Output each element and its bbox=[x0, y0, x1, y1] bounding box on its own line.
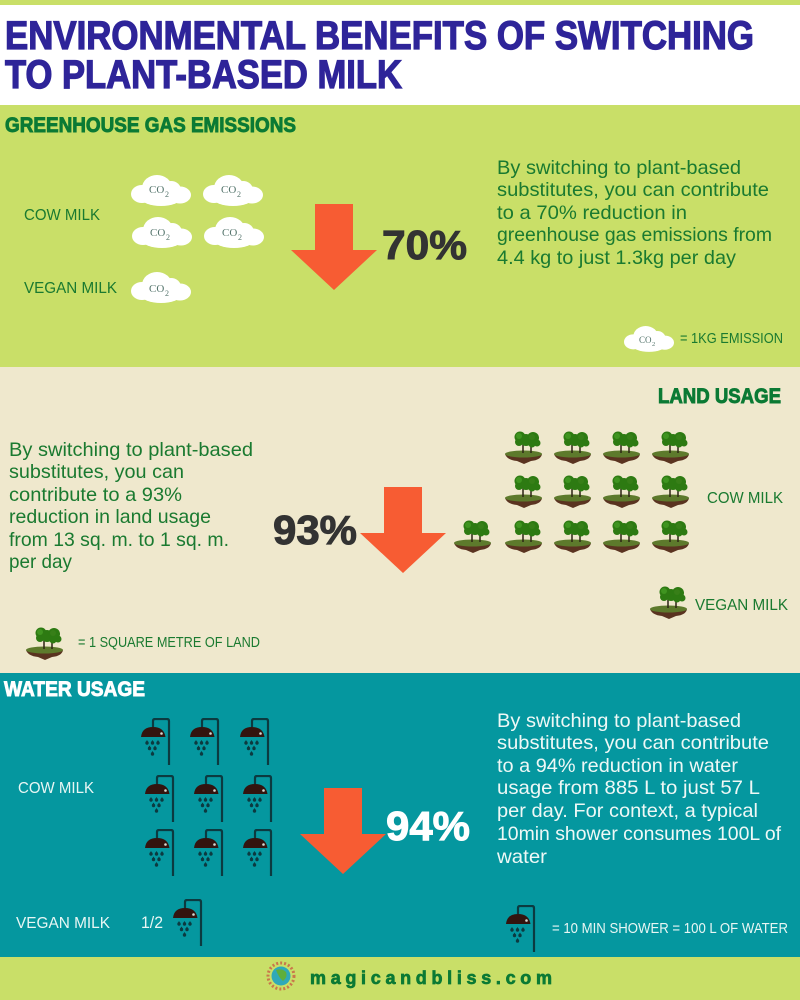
label: cow milk: COW MILK bbox=[24, 207, 100, 224]
icon group: cow milk clouds: CO bbox=[221, 184, 236, 196]
icon group: cow milk trees bbox=[454, 432, 689, 553]
icon group: cow milk clouds: 2 bbox=[237, 190, 241, 199]
stat: 93%: 93% bbox=[273, 507, 357, 553]
arrow: down bbox=[291, 204, 377, 290]
top strip bbox=[0, 0, 800, 5]
text block: water description: usage from 885 L to just 57 L bbox=[497, 777, 760, 799]
stat: 70%: 70% bbox=[382, 222, 467, 268]
text block: greenhouse description: By switching to plant-based bbox=[497, 157, 741, 179]
legend: cloud: 2 bbox=[652, 341, 655, 348]
text block: greenhouse description bbox=[497, 157, 772, 269]
text block: water description bbox=[496, 710, 782, 868]
icon group: cow milk clouds: CO bbox=[150, 227, 165, 239]
icon group: cow milk clouds: CO bbox=[149, 184, 164, 196]
heading: land usage: LAND USAGE bbox=[658, 385, 781, 408]
title bbox=[5, 14, 754, 97]
text block: water description: 10min shower consumes 100L of bbox=[497, 823, 782, 845]
text block: water description: By switching to plant-based bbox=[497, 710, 741, 732]
label: vegan milk: VEGAN MILK bbox=[24, 280, 117, 297]
stat: 94%: 94% bbox=[386, 803, 470, 849]
panel: water usage bbox=[0, 673, 800, 957]
footer website text: magicandbliss.com bbox=[310, 968, 552, 988]
text block: land description bbox=[9, 439, 253, 573]
panel: greenhouse gas emissions bbox=[0, 105, 800, 367]
text block: land description: By switching to plant-based bbox=[9, 439, 253, 461]
text block: greenhouse description: greenhouse gas emissions from bbox=[497, 224, 772, 246]
icon group: cow milk clouds bbox=[131, 175, 264, 248]
icon group: cow milk clouds: 2 bbox=[165, 190, 169, 199]
icon: vegan milk cloud bbox=[131, 272, 191, 303]
legend: cloud: = 1KG EMISSION bbox=[680, 330, 783, 347]
panel: land usage bbox=[0, 367, 800, 673]
icon group: cow milk clouds: CO bbox=[222, 227, 237, 239]
icon group: cow milk clouds: 2 bbox=[238, 233, 242, 242]
text block: greenhouse description: 4.4 kg to just 1.3kg per day bbox=[497, 247, 736, 269]
label: cow milk: COW MILK bbox=[18, 780, 94, 797]
arrow: down bbox=[360, 487, 446, 573]
heading: greenhouse gas emissions: GREENHOUSE GAS EMISSIONS bbox=[5, 114, 296, 137]
text block: water description: to a 94% reduction in water bbox=[497, 755, 739, 777]
footer bbox=[0, 957, 800, 1000]
text block: land description: substitutes, you can bbox=[9, 461, 184, 483]
text block: greenhouse description: substitutes, you can contribute bbox=[497, 179, 769, 201]
legend: tree: = 1 SQUARE METRE OF LAND bbox=[78, 634, 260, 651]
arrow: down bbox=[300, 788, 386, 874]
legend: cloud: CO bbox=[639, 335, 652, 345]
text block: land description: reduction in land usage bbox=[9, 506, 211, 528]
text block: land description: contribute to a 93% bbox=[9, 484, 182, 506]
heading: water usage: WATER USAGE bbox=[4, 678, 145, 701]
label: vegan milk: VEGAN MILK bbox=[695, 597, 788, 614]
legend: cloud bbox=[624, 326, 783, 352]
icon group: cow milk showers bbox=[141, 719, 271, 876]
icon: globe logo bbox=[268, 963, 294, 989]
text block: land description: from 13 sq. m. to 1 sq. m. bbox=[9, 529, 229, 551]
icon: vegan milk tree bbox=[650, 586, 687, 619]
title: TO PLANT-BASED MILK bbox=[5, 53, 402, 97]
title band bbox=[0, 5, 800, 105]
label: cow milk: COW MILK bbox=[707, 490, 783, 507]
legend: tree bbox=[26, 628, 260, 660]
label: vegan milk: VEGAN MILK bbox=[16, 915, 110, 932]
legend: shower bbox=[506, 906, 788, 952]
icon: vegan milk cloud: CO bbox=[149, 283, 164, 295]
text block: land description: per day bbox=[9, 551, 72, 573]
text block: water description: substitutes, you can contribute bbox=[497, 732, 769, 754]
icon group: cow milk clouds: 2 bbox=[166, 233, 170, 242]
text block: water description: water bbox=[496, 846, 548, 868]
text block: greenhouse description: to a 70% reduction in bbox=[497, 202, 687, 224]
icon: vegan milk cloud: 2 bbox=[165, 289, 169, 298]
label: one half: 1/2 bbox=[141, 913, 163, 932]
text block: water description: per day. For context, a typical bbox=[497, 800, 758, 822]
icon: vegan milk shower bbox=[173, 900, 201, 946]
